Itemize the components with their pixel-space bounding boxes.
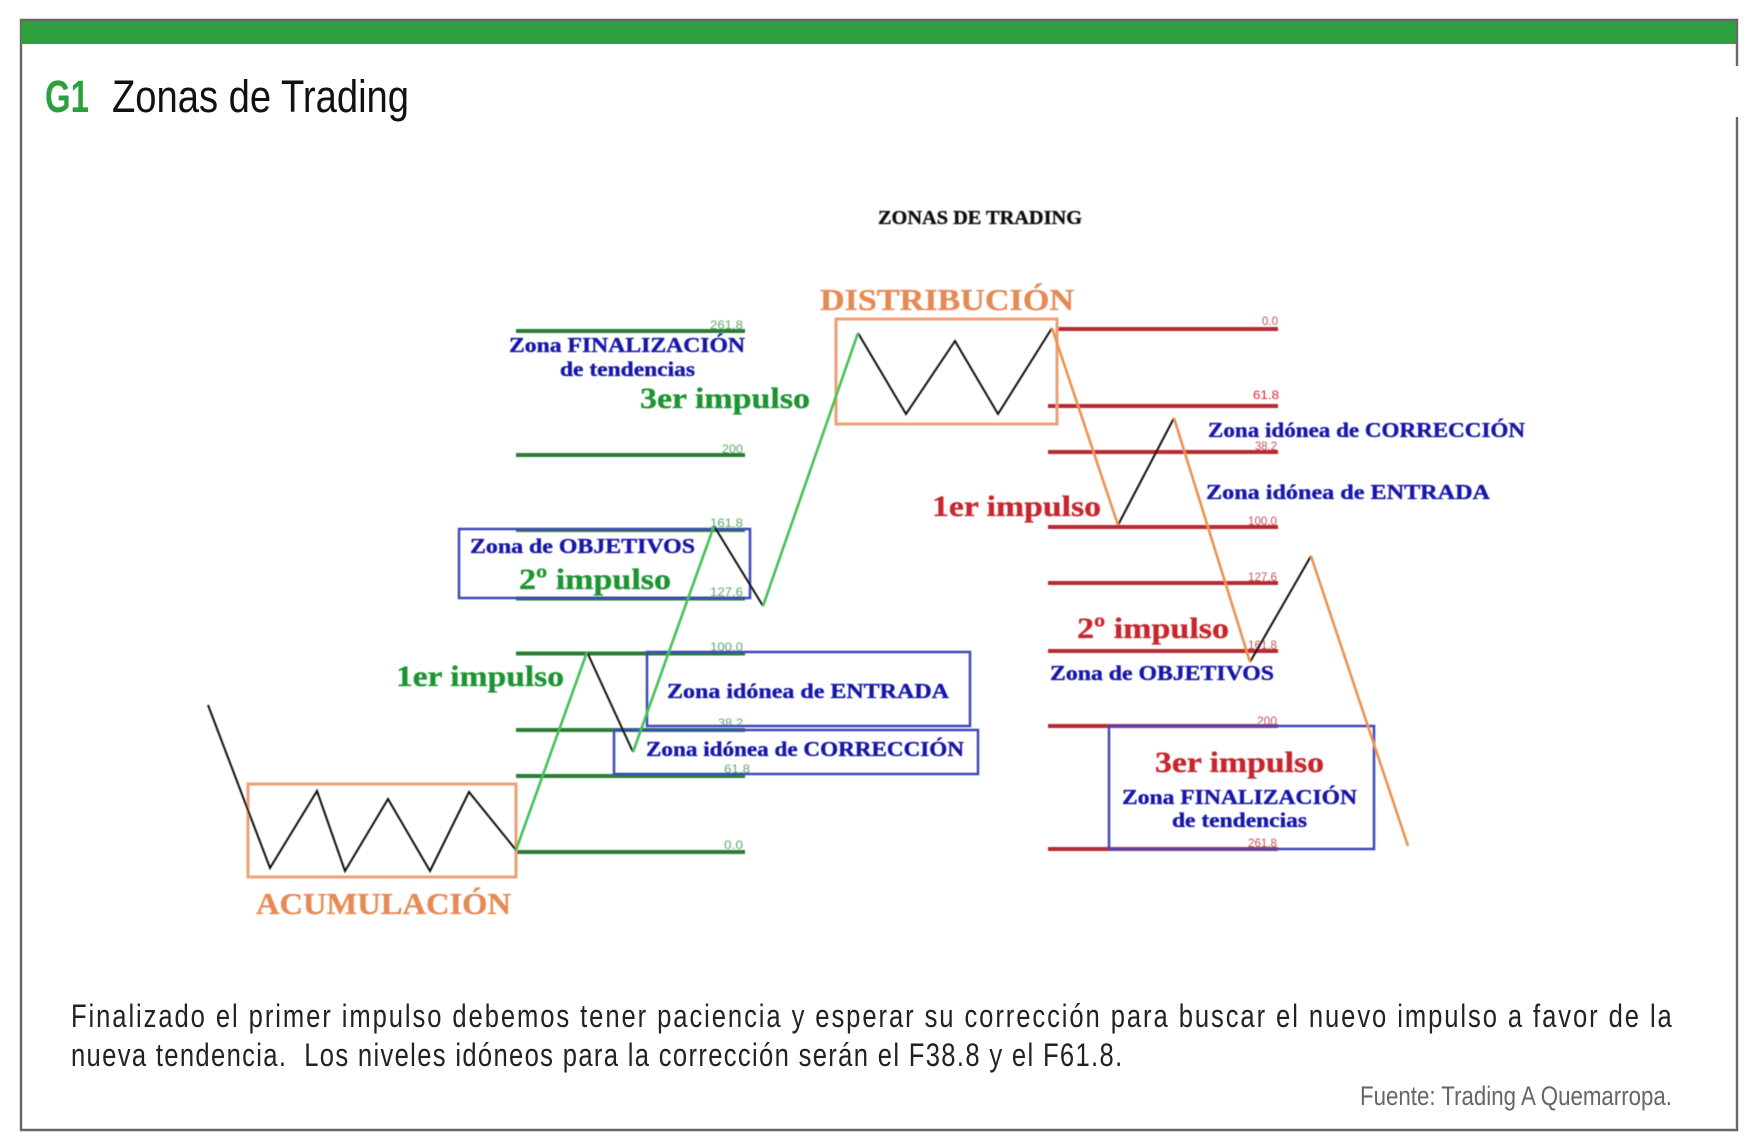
red Fibonacci levels: 161.8: [1248, 638, 1277, 652]
green Fibonacci levels: [516, 318, 750, 852]
price path: black segments: [208, 328, 1311, 871]
accumulation box: [248, 784, 516, 877]
red side labels: Zona de OBJETIVOS: [1050, 661, 1274, 685]
description text: Finalizado el primer impulso debemos tener paciencia y esperar su corrección para buscar el nuevo impulso a favor de la: [71, 999, 1673, 1035]
red side labels: 3er impulso: [1155, 746, 1324, 779]
chart title: ZONAS DE TRADING: [878, 207, 1082, 229]
red Fibonacci levels: 38.2: [1255, 439, 1277, 453]
green Fibonacci levels: 161.8: [710, 516, 743, 530]
green Fibonacci levels: 200: [722, 442, 743, 456]
green Fibonacci levels: 38.2: [718, 716, 743, 730]
green side labels: Zona idónea de CORRECCIÓN: [646, 737, 964, 761]
red Fibonacci levels: 0.0: [1262, 314, 1278, 328]
red side labels: Zona FINALIZACIÓN: [1122, 785, 1357, 809]
distribution label: DISTRIBUCIÓN: [820, 282, 1074, 317]
accumulation label: ACUMULACIÓN: [256, 886, 511, 921]
red Fibonacci levels: 61.8: [1253, 388, 1279, 402]
green side labels: [396, 333, 964, 761]
green Fibonacci levels: 61.8: [724, 762, 750, 776]
title: G1: [45, 71, 89, 122]
header bar: [21, 21, 1736, 44]
red side labels: 1er impulso: [932, 490, 1101, 523]
price path: orange impulses: [1052, 328, 1408, 846]
red Fibonacci levels: [1048, 314, 1279, 850]
description text: [71, 999, 1673, 1074]
green Fibonacci levels: 127.6: [710, 585, 743, 599]
green side labels: 2º impulso: [519, 563, 671, 596]
distribution box: [836, 319, 1057, 424]
green side labels: 1er impulso: [396, 660, 564, 693]
description text: nueva tendencia. Los niveles idóneos para la corrección serán el F38.8 y el F61.8.: [71, 1038, 1122, 1074]
green Fibonacci levels: 100.0: [710, 640, 743, 654]
red side labels: de tendencias: [1172, 808, 1307, 832]
title: Zonas de Trading: [112, 71, 409, 122]
red Fibonacci levels: 100.0: [1248, 514, 1277, 528]
red side labels: Zona idónea de ENTRADA: [1206, 480, 1491, 504]
green side labels: Zona idónea de ENTRADA: [667, 679, 950, 703]
chart: trading zones: [208, 207, 1525, 921]
price path: green impulses: [516, 333, 858, 850]
green side labels: 3er impulso: [640, 382, 810, 415]
red side labels: 2º impulso: [1077, 612, 1229, 645]
red Fibonacci levels: 261.8: [1248, 836, 1277, 850]
green side labels: Zona FINALIZACIÓN: [509, 333, 745, 357]
source note: Fuente: Trading A Quemarropa.: [1360, 1081, 1672, 1111]
red side labels: Zona idónea de CORRECCIÓN: [1208, 418, 1525, 442]
green side labels: de tendencias: [560, 357, 695, 381]
green Fibonacci levels: 0.0: [724, 838, 743, 852]
blue zone boxes: [459, 529, 1374, 849]
green Fibonacci levels: 261.8: [710, 318, 743, 332]
green side labels: Zona de OBJETIVOS: [470, 534, 695, 558]
red Fibonacci levels: 127.6: [1248, 570, 1277, 584]
red Fibonacci levels: 200: [1257, 714, 1277, 728]
red side labels: [932, 418, 1525, 832]
